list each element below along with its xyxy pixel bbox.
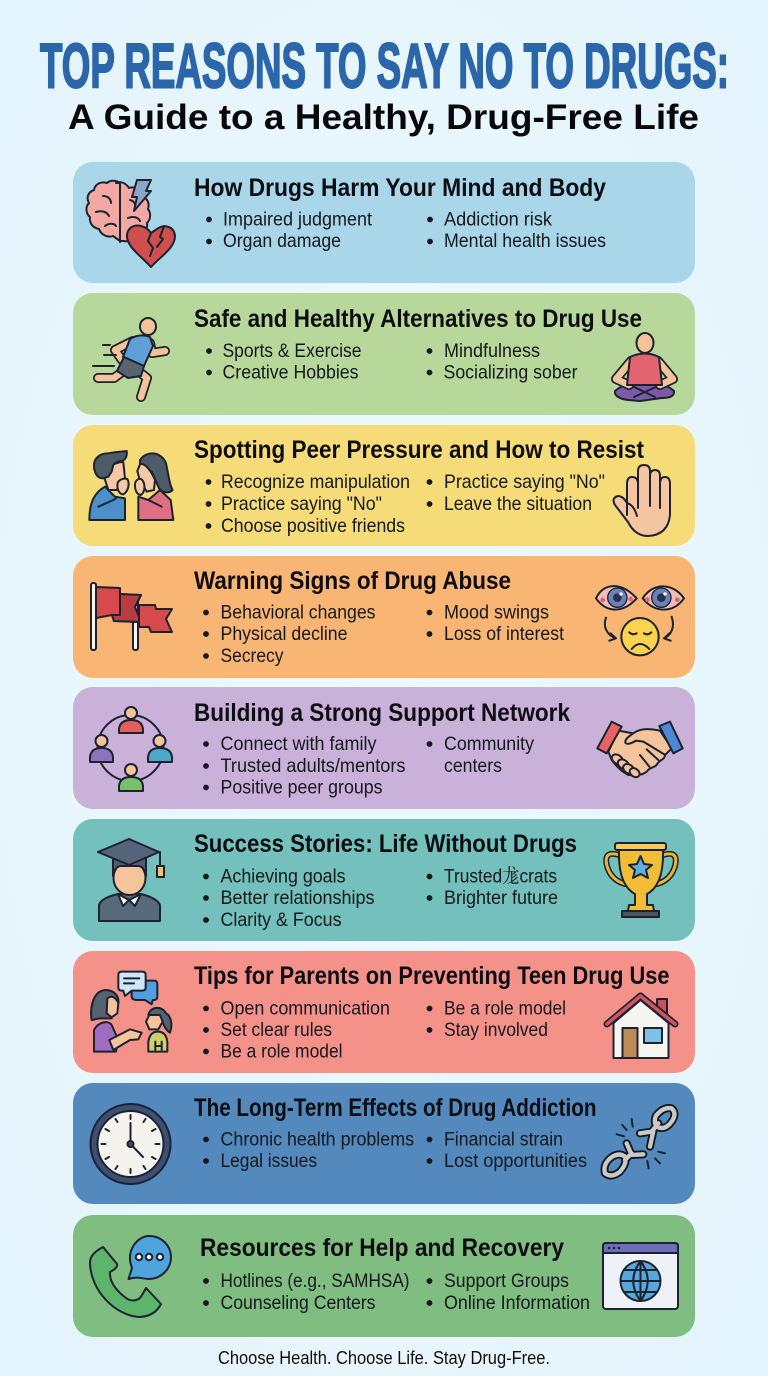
bullet list: mind and body: Addiction risk [444, 208, 552, 230]
bullet list: tips for parents: Be a role model [444, 998, 566, 1020]
icon: runner [93, 318, 165, 397]
bullet list: success stories: Brighter future [444, 887, 558, 909]
icon: browser window with globe [603, 1243, 678, 1309]
bullet list: support network: Connect with family [220, 733, 377, 755]
heading: resources: Resources for Help and Recovery [200, 1234, 564, 1262]
bullet list: tips for parents: Stay involved [444, 1019, 548, 1041]
bullet list: alternatives [206, 340, 578, 384]
bullet list: support network: Community [444, 733, 534, 755]
heading: peer pressure: Spotting Peer Pressure and How to Resist [194, 436, 645, 464]
bullet list: long-term effects: Financial strain [444, 1128, 563, 1150]
icon: parent talking with child [91, 972, 171, 1052]
icon: meditating person [615, 333, 674, 401]
bullet list: tips for parents: Be a role model [220, 1040, 342, 1062]
bullet list: long-term effects: Lost opportunities [444, 1150, 587, 1172]
icon: two people whispering [89, 451, 173, 520]
panel: warning signs [73, 556, 695, 678]
bullet list: support network: Trusted adults/mentors [220, 755, 406, 777]
bullet list: peer pressure: Choose positive friends [221, 515, 405, 537]
icon: phone and chat bubble [90, 1236, 171, 1317]
bullet list: resources: Counseling Centers [220, 1292, 376, 1314]
bullet list: warning signs [203, 602, 565, 667]
bullet list: resources: Online Information [444, 1292, 590, 1314]
bullet list: resources: Support Groups [444, 1270, 569, 1292]
bullet list: success stories: Better relationships [220, 887, 375, 909]
bullet list: support network: centers [444, 755, 502, 777]
bullet list: long-term effects [203, 1128, 587, 1172]
bullet list: tips for parents [203, 998, 566, 1062]
bullet list: mind and body: Organ damage [223, 230, 341, 252]
panel: support network [73, 687, 695, 809]
bullet list: peer pressure: Leave the situation [444, 493, 592, 515]
bullet list: support network: Positive peer groups [220, 776, 383, 798]
icon: raised stop hand [614, 465, 670, 536]
bullet list: resources [203, 1270, 590, 1314]
bullet list: peer pressure: Recognize manipulation [221, 471, 410, 493]
footer tagline: Choose Health. Choose Life. Stay Drug-Free. [218, 1348, 550, 1368]
panel: safe and healthy alternatives [73, 293, 695, 415]
icon: graduate [98, 839, 164, 921]
subtitle: A Guide to a Healthy, Drug-Free Life [68, 98, 699, 137]
icon: circle of people [90, 707, 172, 791]
bullet list: peer pressure: Practice saying "No" [444, 471, 605, 493]
icon: brain with lightning and broken heart [86, 180, 175, 267]
bullet list: success stories: Achieving goals [220, 866, 346, 888]
bullet list: success stories: Clarity & Focus [220, 909, 342, 931]
bullet list: alternatives: Mindfulness [444, 340, 540, 362]
icon: broken chain [604, 1108, 674, 1175]
heading: alternatives: Safe and Healthy Alternatives to Drug Use [194, 305, 642, 333]
heading: success stories: Success Stories: Life Without Drugs [194, 830, 577, 858]
icon: red eyes and sad face [596, 586, 684, 655]
panel: tips for parents [73, 951, 695, 1073]
bullet list: resources: Hotlines (e.g., SAMHSA) [220, 1270, 410, 1292]
bullet list: peer pressure [206, 471, 605, 537]
icon: clock [90, 1104, 170, 1184]
icon: red flags [91, 583, 172, 650]
bullet list: mind and body [206, 208, 606, 252]
bullet list: warning signs: Physical decline [220, 623, 348, 645]
panel: spotting peer pressure [73, 425, 695, 546]
bullet list: warning signs: Mood swings [444, 602, 549, 624]
bullet list: mind and body: Mental health issues [444, 230, 606, 252]
icon: house [607, 996, 675, 1058]
icon: trophy [606, 843, 676, 917]
panel: success stories [73, 819, 695, 941]
bullet list: tips for parents: Set clear rules [220, 1019, 332, 1041]
heading: mind and body: How Drugs Harm Your Mind and Body [194, 174, 606, 202]
bullet list: warning signs: Behavioral changes [220, 602, 376, 624]
bullet list: alternatives: Sports & Exercise [222, 340, 362, 362]
bullet list: tips for parents: Open communication [220, 998, 390, 1020]
heading: tips for parents: Tips for Parents on Preventing Teen Drug Use [194, 962, 670, 990]
heading: long-term effects: The Long-Term Effects of Drug Addiction [194, 1094, 596, 1122]
panel: resources for help [73, 1215, 695, 1337]
panel: how drugs harm your mind and body [73, 162, 695, 283]
panel: long-term effects [73, 1083, 695, 1204]
heading: support network: Building a Strong Support Network [194, 699, 570, 727]
bullet list: alternatives: Socializing sober [444, 362, 578, 384]
bullet list: long-term effects: Chronic health problems [220, 1128, 414, 1150]
heading: warning signs: Warning Signs of Drug Abuse [194, 567, 511, 595]
bullet list: alternatives: Creative Hobbies [222, 362, 359, 384]
bullet list: peer pressure: Practice saying "No" [221, 493, 382, 515]
bullet list: mind and body: Impaired judgment [223, 208, 373, 230]
bullet list: warning signs: Secrecy [220, 645, 284, 667]
bullet list: success stories: Trusted尨crats [444, 866, 557, 888]
icon: handshake [597, 722, 683, 779]
bullet list: support network [203, 733, 534, 798]
bullet list: long-term effects: Legal issues [220, 1150, 317, 1172]
bullet list: success stories [203, 866, 558, 931]
bullet list: warning signs: Loss of interest [444, 623, 565, 645]
